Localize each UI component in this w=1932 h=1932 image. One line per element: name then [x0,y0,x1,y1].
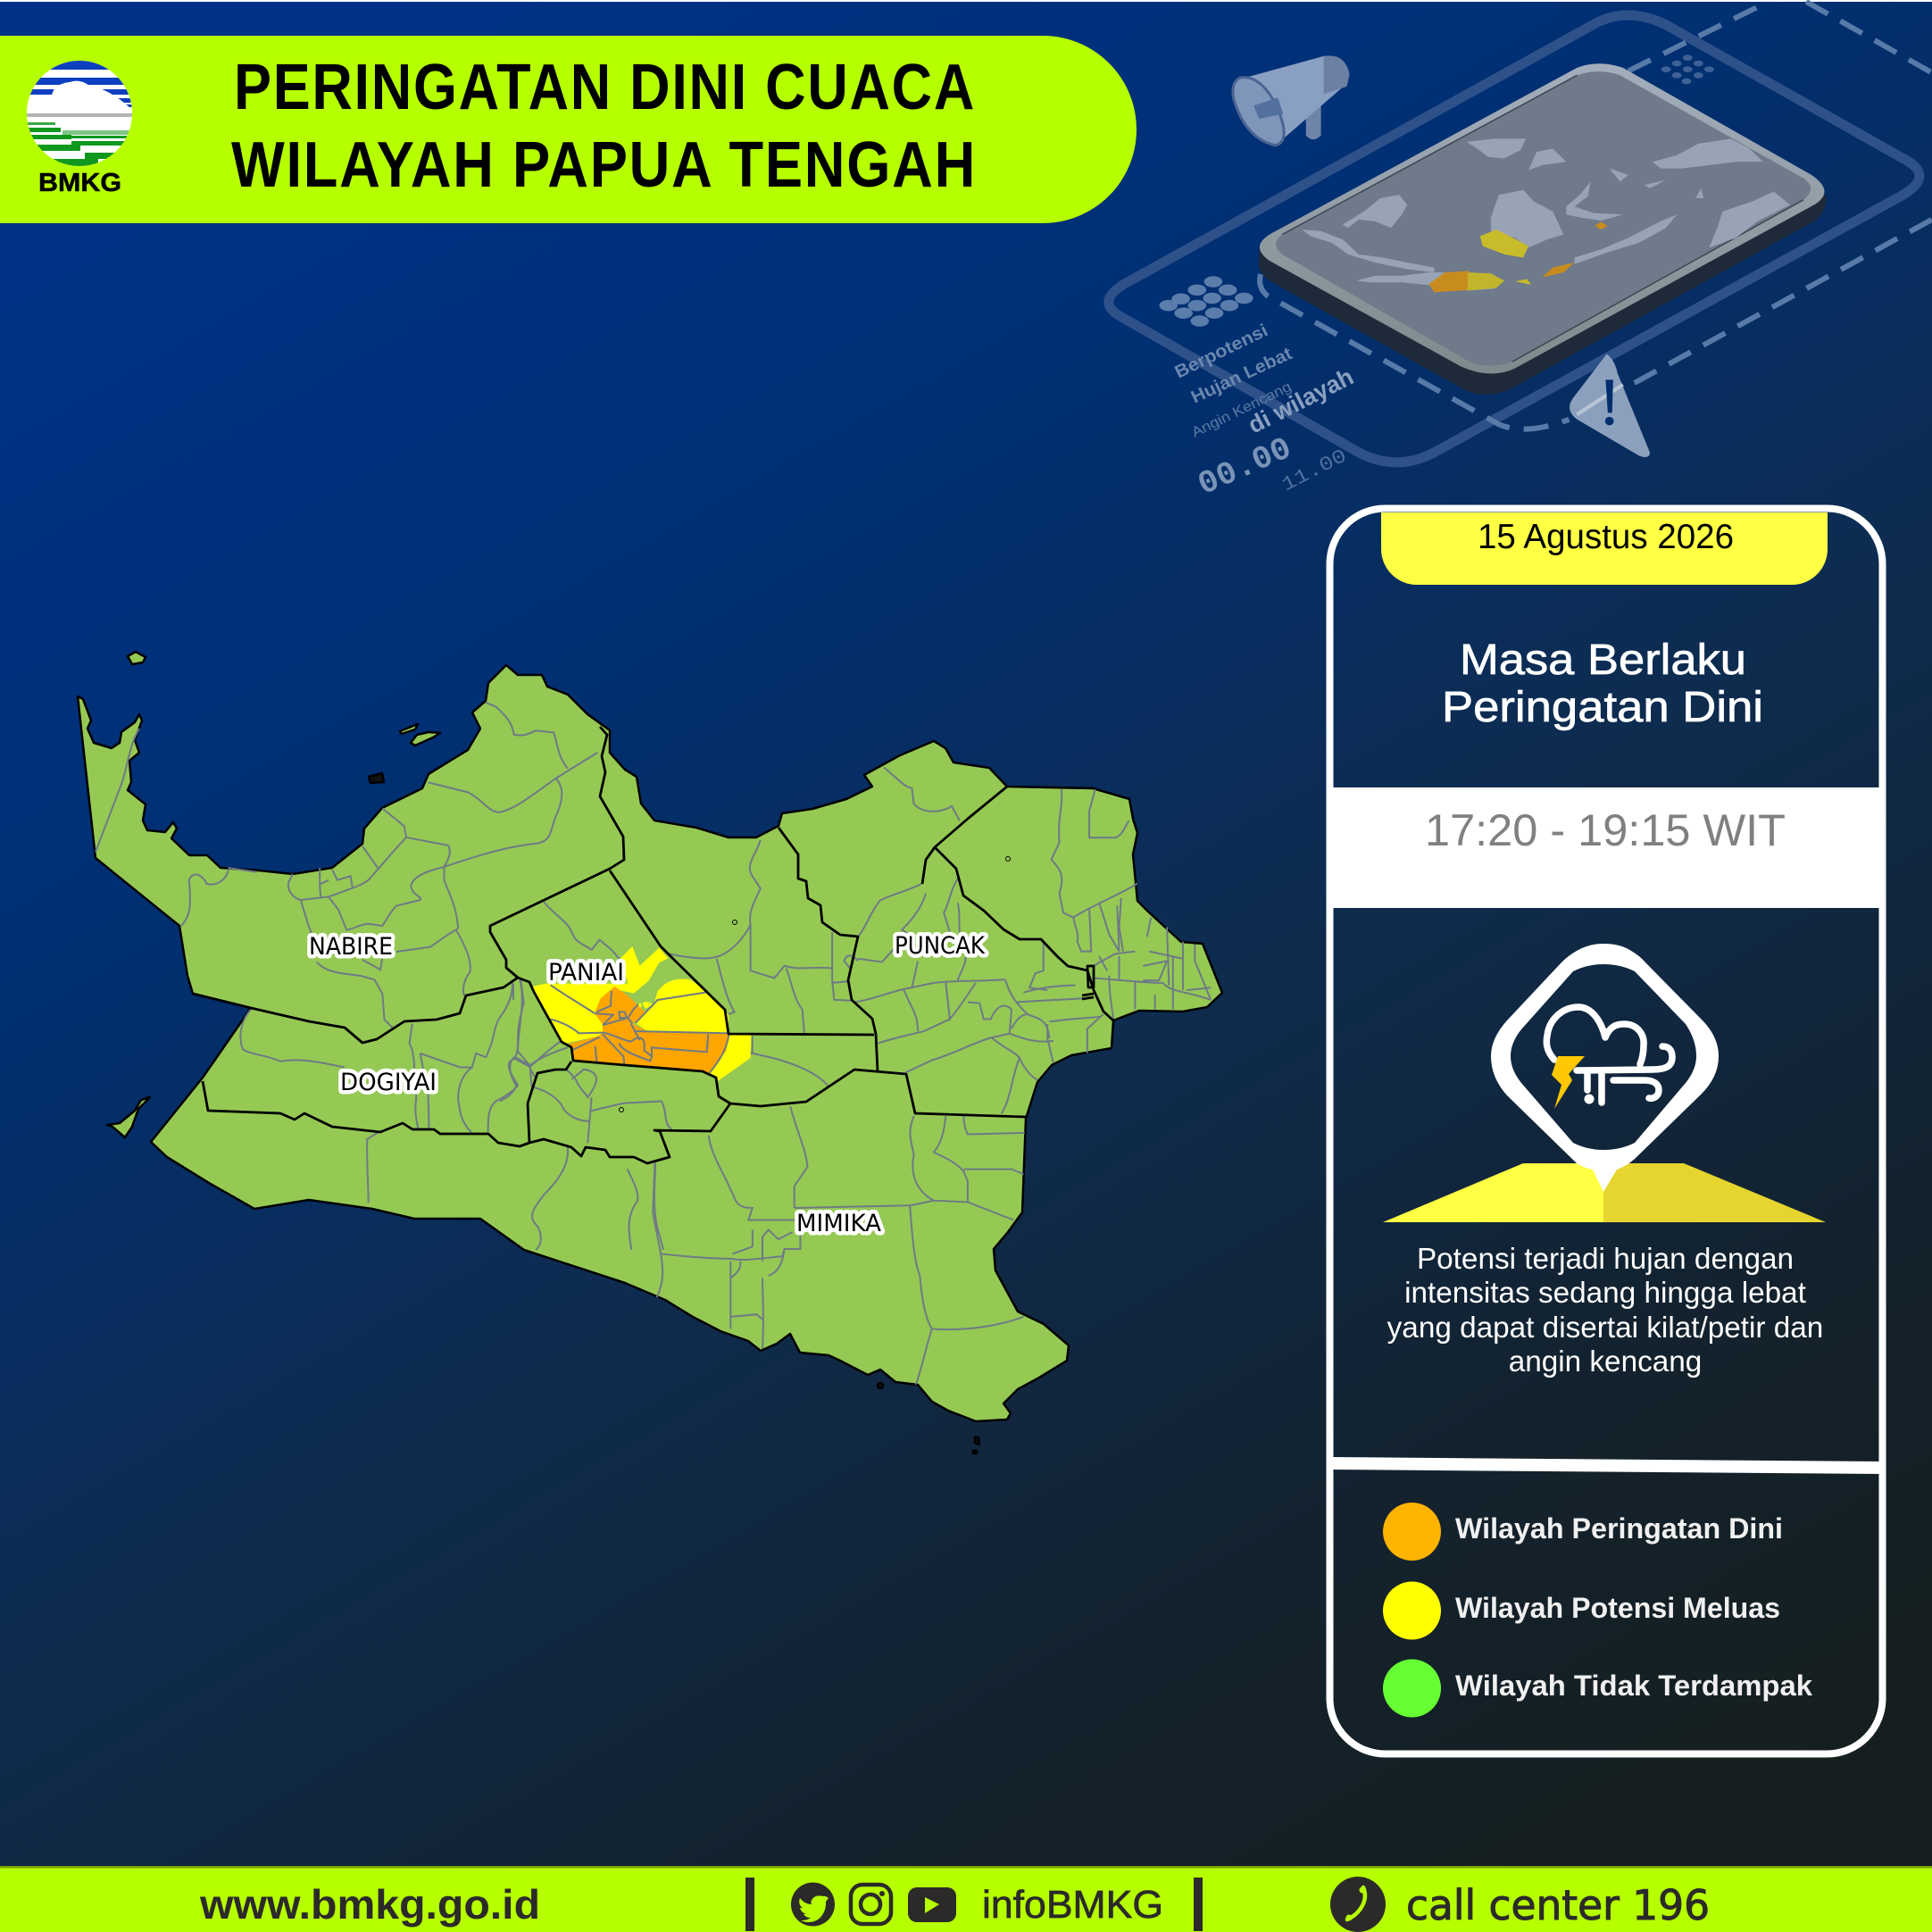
time: 17:20 - 19:15 WIT [1425,805,1786,855]
time band [1327,787,1886,908]
description: yang dapat disertai kilat/petir dan [1387,1312,1823,1345]
date tab [1381,512,1828,585]
icon: lightning bolt [1552,1056,1585,1109]
footer [0,1866,1932,1932]
call center: call center 196 [1406,1881,1710,1929]
map: Papua Tengah [78,652,1222,1453]
tablet map land [1303,138,1790,291]
date: 15 Agustus 2026 [1478,518,1734,556]
decorative text: Angin Kencang: Angin Kencang [1189,379,1294,441]
legend item: early warning: Wilayah Peringatan Dini [1455,1512,1783,1545]
panel: validity and legend [1327,509,1886,1753]
decorative text: clock: 00.00 [1193,430,1297,504]
dot clusters [1159,54,1714,327]
decorative text: Berpotensi: Berpotensi [1172,321,1271,382]
legend item: potential spread: Wilayah Potensi Meluas [1455,1592,1780,1624]
decorative text: di wilayah: di wilayah [1244,363,1358,438]
islands [107,652,979,1453]
heading: Masa Berlaku Peringatan Dini: Masa Berlaku [1460,637,1746,684]
icon: BMKG logo [27,61,132,191]
warning region: orange early warning [567,987,729,1073]
icon: megaphone [1233,55,1350,146]
icon: storm cloud and wind [1546,1007,1672,1103]
legend item: potential spread [1383,1582,1780,1639]
header banner [0,36,1137,223]
icon: phone [1330,1877,1386,1932]
decorative isometric tablet illustration [1109,2,1932,504]
district boundaries Paniai [500,979,753,1101]
legend item: not affected: Wilayah Tidak Terdampak [1455,1670,1812,1702]
title: PERINGATAN DINI CUACA [234,52,976,123]
legend [1383,1503,1812,1718]
warning region: yellow potential spread [532,946,752,1081]
tablet map warning regions [1428,222,1608,292]
label: NABIRE: NABIRE [309,933,393,961]
district boundaries west [96,703,671,1250]
icon: youtube [908,1887,956,1922]
heading: Masa Berlaku Peringatan Dini [1442,637,1763,731]
outer rounded frame [1109,2,1932,462]
title: WILAYAH PAPUA TENGAH [231,129,977,201]
decorative text: end clock: 11.00 [1278,446,1351,496]
website: www.bmkg.go.id [199,1881,540,1928]
description [1387,1243,1823,1378]
tablet body [1259,63,1827,395]
icon: twitter [791,1882,835,1927]
icon: warning sign [1570,354,1650,457]
legend item: early warning [1383,1503,1783,1561]
label: PUNCAK: PUNCAK [895,932,986,960]
separators [745,1878,1203,1931]
legend item: not affected [1383,1659,1812,1718]
map land [78,665,1222,1421]
description: angin kencang [1509,1345,1702,1378]
heading: Masa Berlaku Peringatan Dini: Peringatan Dini [1442,684,1763,731]
social handle: infoBMKG [982,1883,1163,1927]
panel frame [1330,509,1882,1753]
icon: BMKG logo: BMKG [38,169,121,197]
icon: weather pin on yellow base [1383,944,1826,1222]
title [231,52,977,201]
label: MIMIKA: MIMIKA [796,1210,882,1237]
label: PANIAI: PANIAI [548,959,624,987]
description: Potensi terjadi hujan dengan [1417,1243,1794,1276]
icon: instagram [851,1885,891,1924]
decorative text: Hujan Lebat: Hujan Lebat [1188,344,1295,408]
description: intensitas sedang hingga lebat [1404,1277,1806,1310]
label: DOGIYAI: DOGIYAI [340,1069,437,1096]
regency boundaries [193,727,1113,1163]
district boundaries east [653,768,1211,1385]
divider [1327,1457,1886,1474]
